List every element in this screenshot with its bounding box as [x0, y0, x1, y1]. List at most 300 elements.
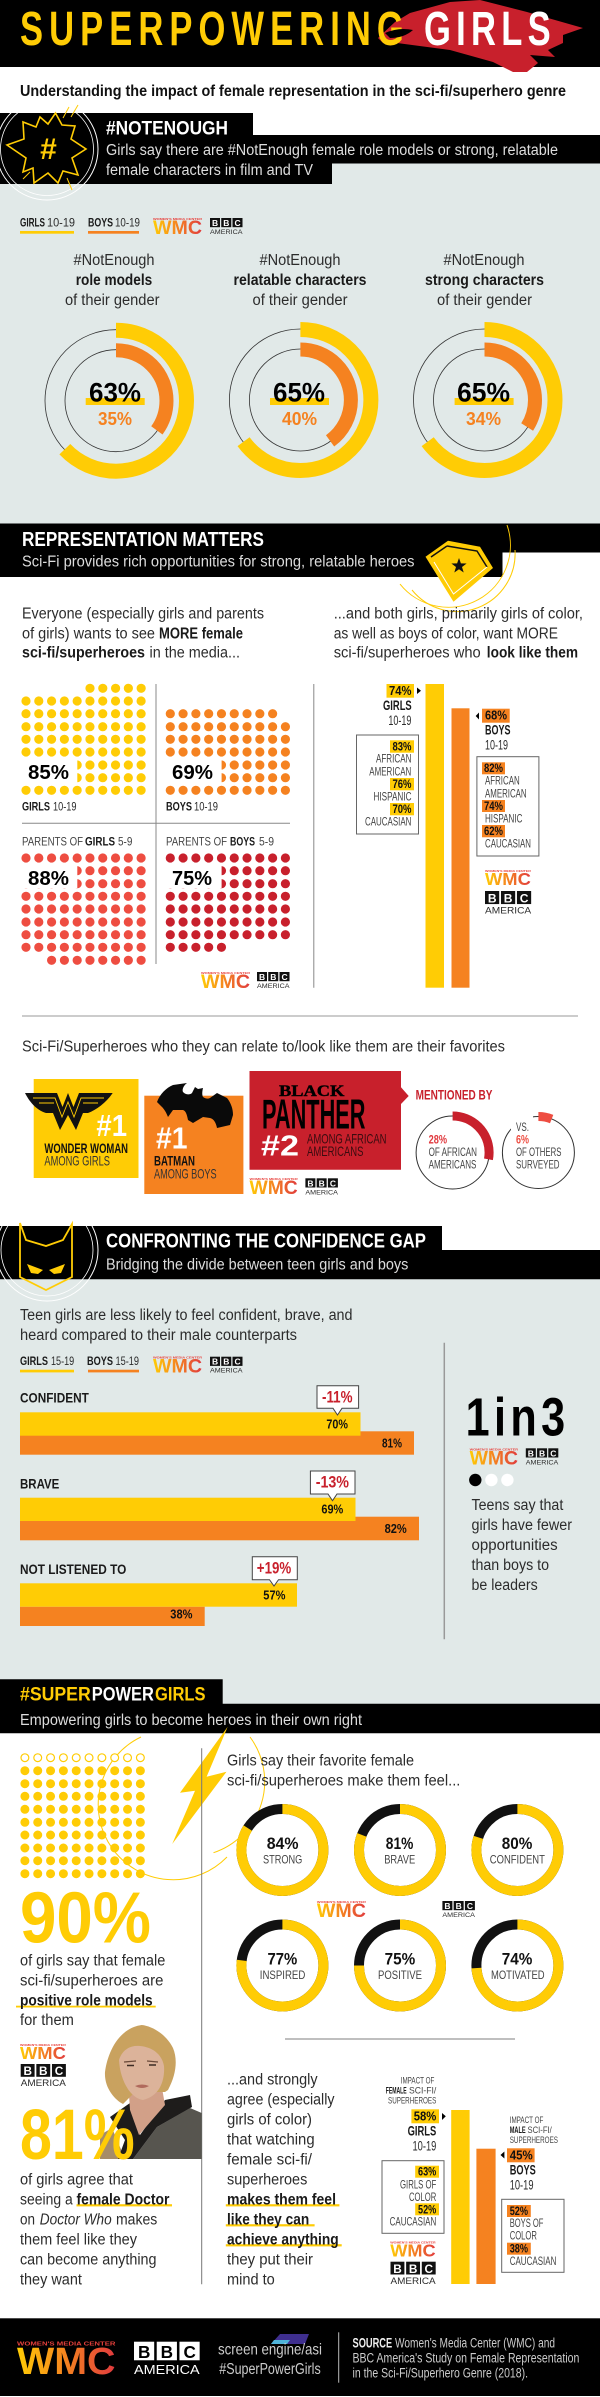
text: everyone wants more: MORE female	[159, 625, 243, 642]
logo: BBC America: AMERICA	[526, 1459, 559, 1466]
callout: -13%	[310, 1471, 355, 1501]
logo: WMC: WMC	[20, 2043, 66, 2063]
ring: 77% inspired: INSPIRED	[260, 1968, 306, 1982]
icon: burst with hash: #	[40, 133, 57, 166]
donut chart: 63% vs 35%: 63%	[89, 378, 141, 408]
chart: 28% of African Americans: 28%	[429, 1134, 447, 1146]
legend: girls and boys 10-19: 10-19	[47, 218, 75, 230]
stat: 81%: them feel like they	[20, 2231, 137, 2248]
logo: WMC: WOMEN'S MEDIA CENTER	[390, 2242, 436, 2245]
dot chart: parents of boys 75%: 5-9	[259, 836, 274, 848]
girls breakdown: 10-19	[388, 712, 412, 728]
male heroes breakdown: IMPACT OF	[510, 2115, 544, 2125]
male heroes breakdown: 10-19	[510, 2176, 534, 2192]
panel: Wonder Woman: WONDER WOMAN	[44, 1140, 128, 1156]
chart: 6% of others surveyed: SURVEYED	[516, 1158, 560, 1172]
text: relatable label: relatable characters	[234, 272, 366, 289]
ring: 74% motivated: 74%	[502, 1949, 532, 1968]
stat: 90%: 90%	[20, 1879, 151, 1959]
male heroes breakdown: SUPERHEROES	[510, 2135, 558, 2145]
stat: 81%: of girls agree that	[20, 2171, 134, 2188]
logo: BBC America	[210, 218, 243, 236]
text: strongly agree	[226, 2071, 342, 2288]
bar chart: confident: CONFIDENT	[20, 1390, 89, 1406]
logo: BBC America: AMERICA	[442, 1912, 476, 1919]
logo: BBC America: B	[409, 2262, 417, 2276]
panel: Representation Matters header: Sci-Fi provides rich opportunities for strong, relatable heroes	[22, 554, 415, 571]
ring: 80% confident: 80%	[502, 1834, 532, 1853]
legend: girls and boys 10-19	[20, 218, 140, 234]
logo: BBC America: B	[393, 2262, 402, 2276]
callout: +19%	[252, 1557, 297, 1586]
panel: Representation Matters header: REPRESENTATION MATTERS	[22, 529, 264, 551]
panel: not enough background	[0, 163, 600, 524]
logo: WMC: WOMEN'S MEDIA CENTER	[20, 2044, 66, 2047]
dot chart: girls 85%: 85%	[28, 762, 69, 784]
girls breakdown: GIRLS	[383, 697, 412, 713]
logo: BBC America: C	[234, 218, 241, 228]
bar: female heroes impact 58%	[451, 2110, 470, 2284]
stat: 81%: 81%	[20, 2096, 135, 2175]
panel: Confronting the Confidence Gap header	[0, 1199, 600, 1301]
text: favorites intro: Sci-Fi/Superheroes who they can relate to/look like them are their favorites	[22, 1039, 505, 1056]
girls breakdown: 76%	[392, 779, 412, 791]
panel: #SuperPowerGirls header: Empowering girls to become heroes in their own right	[20, 1712, 363, 1729]
logo: BBC America: C	[183, 2342, 196, 2362]
logo: BBC America: B	[223, 218, 229, 228]
stat: 90%: sci-fi/superheroes are	[20, 1973, 163, 1990]
panel: header banner	[0, 0, 600, 72]
ring: 74% motivated	[476, 1924, 558, 2006]
panel: Wonder Woman: #1	[96, 1108, 127, 1143]
stat: 81%: they want	[20, 2271, 83, 2288]
stat: 90%: for them	[20, 2012, 74, 2029]
legend: girls and boys 15-19: BOYS	[87, 1356, 113, 1368]
text: favorite heroes intro: Girls say their favorite female	[227, 1753, 414, 1770]
boys breakdown: BOYS	[485, 722, 510, 738]
stat: 90%: positive role models	[20, 1993, 153, 2010]
panel: confidence gap background	[0, 1250, 600, 1704]
girls breakdown: 83%	[392, 741, 412, 753]
panel: 1 in 3 stat: 1in3	[466, 1388, 565, 1448]
text: favorite heroes intro	[227, 1753, 460, 1790]
logo: BBC America: AMERICA	[305, 1189, 339, 1196]
red brush stroke	[378, 0, 583, 72]
panel: Black Panther: AMONG AFRICAN	[307, 1131, 386, 1147]
text: favorite heroes intro: sci-fi/superheroes make them feel...	[227, 1773, 460, 1790]
logo: BBC America: B	[528, 1448, 534, 1458]
logo: BBC America: C	[234, 1357, 241, 1367]
text: teen girls intro	[20, 1307, 352, 1344]
stat: 81%	[20, 2096, 172, 2288]
ring: 80% confident	[476, 1809, 558, 1891]
logo: BBC America: B	[307, 1178, 314, 1188]
legend: girls and boys 10-19: 10-19	[115, 218, 140, 230]
panel: 1 in 3 stat: Teens say that	[472, 1497, 564, 1514]
chart: 28% of African Americans	[416, 1116, 489, 1189]
boys breakdown: AFRICAN	[485, 774, 520, 788]
legend: girls and boys 15-19: 15-19	[51, 1356, 74, 1368]
stat: 81%: can become anything	[20, 2251, 156, 2268]
text: everyone wants more: Everyone (especially girls and parents	[22, 605, 264, 622]
text: strongly agree: they put their	[227, 2251, 313, 2268]
chart: 6% of others surveyed: OF OTHERS	[516, 1145, 561, 1159]
logo: BBC America: B	[444, 1901, 451, 1911]
logo: WMC: WOMEN'S MEDIA CENTER	[317, 1900, 366, 1904]
text: strongly agree: female sci-fi/	[227, 2151, 313, 2168]
boys breakdown: CAUCASIAN	[485, 836, 531, 850]
bar chart: confident	[20, 1386, 414, 1455]
donut chart: 65% vs 34%: 34%	[466, 409, 501, 429]
logo: BBC America: C	[467, 1901, 473, 1911]
text: teen girls intro: Teen girls are less likely to feel confident, brave, and	[20, 1307, 352, 1324]
panel: footer	[0, 2318, 600, 2396]
female heroes breakdown: SUPERHEROES	[388, 2095, 436, 2105]
chart: 28% of African Americans: OF AFRICAN	[429, 1145, 477, 1159]
chart: 6% of others surveyed	[502, 1112, 574, 1188]
panel: strong characters	[414, 252, 556, 471]
logo: BBC America	[21, 2064, 66, 2088]
heading: #NOTENOUGH	[106, 118, 228, 140]
icon: wonder woman logo	[25, 1093, 113, 1130]
ring: 77% inspired	[241, 1924, 323, 2006]
logo: WMC: WMC	[250, 1178, 298, 1199]
text: strongly agree: ...and strongly	[227, 2071, 318, 2088]
dot chart: parents of girls 88%: 5-9	[118, 836, 132, 848]
ring: 81% brave: BRAVE	[384, 1853, 415, 1867]
logo: BBC America: B	[456, 1901, 462, 1911]
text: everyone wants more: sci-fi/superheroes	[22, 644, 145, 661]
icon: lightning bolt	[172, 1727, 228, 1844]
bar chart: confident: 81%	[382, 1436, 402, 1450]
logo: BBC America: AMERICA	[210, 229, 243, 236]
panel: Black Panther: AMERICANS	[307, 1143, 364, 1159]
male heroes breakdown: SCI-FI/	[528, 2125, 552, 2135]
icon: mask	[0, 1199, 98, 1301]
text: role models label: role models	[76, 272, 152, 289]
stat: 90%: of girls say that female	[20, 1953, 165, 1970]
description	[106, 142, 558, 179]
bar chart: brave	[20, 1471, 419, 1540]
icon: bat	[157, 1083, 233, 1128]
legend: girls and boys 10-19: GIRLS	[20, 218, 45, 230]
text: everyone wants more: in the media...	[150, 644, 240, 661]
dot chart: parents of boys 75%: BOYS	[230, 836, 255, 848]
girls breakdown: AFRICAN	[376, 752, 411, 766]
text: strong label: #NotEnough	[444, 252, 524, 269]
donut chart: 65% vs 40%	[229, 329, 371, 471]
logo: BBC America: B	[23, 2064, 32, 2078]
logo: BBC America: C	[520, 891, 529, 905]
logo: BBC America: B	[259, 972, 265, 982]
girls breakdown	[356, 684, 421, 834]
donut chart: 65% vs 40%: 65%	[273, 378, 325, 408]
bar chart: brave: 82%	[385, 1522, 407, 1536]
legend: girls and boys 10-19: BOYS	[88, 218, 113, 230]
logo: BBC America	[485, 891, 532, 916]
male heroes breakdown: BOYS OF	[510, 2216, 543, 2230]
stat: 81%: seeing a	[20, 2191, 73, 2208]
stat: 81%: on	[20, 2211, 35, 2228]
text: girls of color want: as well as boys of color, want MORE	[334, 625, 558, 642]
boys breakdown: AMERICAN	[485, 786, 527, 800]
panel: #NotEnough header	[0, 98, 600, 200]
text: strongly agree: that watching	[227, 2131, 315, 2148]
male heroes breakdown: 45%	[510, 2148, 533, 2162]
dot chart: parents of girls 88%: 88%	[28, 868, 69, 890]
girls breakdown: 70%	[392, 804, 412, 816]
ring: 84% strong: STRONG	[263, 1853, 302, 1867]
dot chart: parents of girls 88%	[20, 836, 141, 960]
legend: girls and boys 15-19	[20, 1356, 139, 1372]
text: girls of color want	[334, 605, 583, 661]
dot chart: parents of girls 88%: PARENTS OF	[22, 836, 83, 848]
male heroes breakdown: MALE	[510, 2125, 526, 2135]
callout: -11%	[317, 1386, 359, 1415]
text: strong label: of their gender	[437, 292, 532, 309]
text: role models label: of their gender	[65, 292, 160, 309]
logo: BBC America: C	[330, 1178, 336, 1188]
logo: BBC America: AMERICA	[390, 2276, 436, 2286]
male heroes breakdown: 52%	[510, 2206, 528, 2218]
logo: BBC America: B	[488, 891, 497, 905]
donut chart: 65% vs 34%: 65%	[457, 378, 510, 408]
panel: Confronting the Confidence Gap header: Bridging the divide between teen girls and boys	[106, 1256, 409, 1273]
panel: #SuperPowerGirls header: POWER	[92, 1684, 154, 1706]
logo: BBC America: B	[212, 218, 218, 228]
panel: Wonder Woman	[25, 1079, 138, 1178]
dot chart: parents of boys 75%: PARENTS OF	[166, 836, 227, 848]
text: role models label	[65, 252, 160, 309]
girls breakdown: CAUCASIAN	[365, 814, 411, 828]
logo: BBC America: C	[55, 2064, 64, 2078]
panel: relatable characters	[229, 252, 371, 471]
panel: #SuperPowerGirls header: GIRLS	[155, 1684, 206, 1706]
title: GIRLS	[424, 1, 551, 55]
text: everyone wants more	[22, 605, 264, 661]
donut chart: 65% vs 40%: 40%	[282, 409, 317, 429]
text: role models label: #NotEnough	[74, 252, 154, 269]
logo: screen engine/asi: screen engine/asi	[218, 2341, 322, 2358]
ring: 75% positive: POSITIVE	[378, 1968, 422, 1982]
callout: -11%: -11%	[322, 1387, 352, 1406]
panel: Black Panther	[250, 1071, 409, 1170]
donut chart: 65% vs 34%	[414, 329, 556, 471]
text: relatable label: #NotEnough	[260, 252, 340, 269]
boys breakdown: 10-19	[485, 737, 508, 753]
dot chart: boys 69%: 69%	[172, 762, 213, 784]
chart: 28% of African Americans: AMERICANS	[429, 1158, 476, 1172]
source text	[352, 2335, 579, 2380]
title: SUPERPOWERING	[20, 1, 404, 55]
hashtag: #SuperPowerGirls	[219, 2361, 321, 2378]
stat: 81%: makes	[116, 2211, 158, 2228]
female heroes breakdown: GIRLS	[408, 2122, 436, 2138]
panel: #SuperPowerGirls header: #SUPER	[20, 1684, 91, 1706]
ring: 84% strong: 84%	[267, 1834, 298, 1853]
bar chart: confident: 70%	[326, 1417, 348, 1431]
panel: #SuperPowerGirls header	[0, 1679, 600, 1733]
female heroes breakdown: 63%	[418, 2167, 436, 2179]
text: strongly agree: mind to	[227, 2271, 275, 2288]
chart: 6% of others surveyed: 6%	[516, 1134, 529, 1146]
logo: WMC: WMC	[317, 1901, 366, 1922]
panel: Confronting the Confidence Gap header: CONFRONTING THE CONFIDENCE GAP	[106, 1230, 426, 1252]
logo: BBC America: B	[504, 891, 513, 905]
logo: WMC: WOMEN'S MEDIA CENTER	[201, 971, 250, 975]
female heroes breakdown: FEMALE	[386, 2085, 407, 2095]
logo: BBC America: AMERICA	[485, 906, 532, 916]
dot chart: girls 85%: GIRLS	[22, 802, 50, 814]
logo: BBC America	[442, 1901, 476, 1919]
text: relatable label	[234, 252, 366, 309]
ring: 84% strong	[241, 1809, 323, 1891]
text: everyone wants more: of girls) wants to see	[22, 625, 155, 642]
logo: WMC: WMC	[153, 1357, 202, 1378]
ring: 75% positive	[359, 1924, 441, 2006]
logo: WMC: WOMEN'S MEDIA CENTER	[17, 2342, 116, 2348]
logo: WMC: WMC	[153, 218, 202, 239]
panel: Wonder Woman: AMONG GIRLS	[44, 1153, 110, 1169]
panel: Batman	[144, 1083, 243, 1194]
panel: Batman: #1	[156, 1120, 188, 1155]
text: strong label: strong characters	[425, 272, 544, 289]
logo: BBC America	[134, 2342, 200, 2377]
source text: SOURCE	[352, 2335, 392, 2350]
logo: BBC America: AMERICA	[21, 2078, 66, 2088]
boys breakdown: HISPANIC	[485, 811, 523, 825]
panel: Black Panther: PANTHER	[262, 1090, 366, 1137]
stat: 81%: Doctor Who	[40, 2211, 112, 2228]
panel: Black Panther: BLACK	[279, 1083, 345, 1100]
logo: BBC America: B	[539, 1448, 545, 1458]
logo: WMC: WOMEN'S MEDIA CENTER	[153, 217, 202, 221]
panel: 1 in 3 stat: than boys to	[472, 1557, 549, 1574]
panel: Representation Matters header	[0, 524, 600, 577]
dot chart: parents of boys 75%: 75%	[172, 868, 212, 890]
male heroes breakdown: CAUCASIAN	[510, 2254, 556, 2268]
dot chart: boys 69%	[164, 714, 286, 814]
bar chart: not listened to: 57%	[263, 1588, 286, 1602]
logo: BBC America	[526, 1448, 559, 1466]
logo: BBC America: B	[39, 2064, 48, 2078]
logo: BBC America: B	[161, 2342, 173, 2362]
chart: 6% of others surveyed: VS.	[516, 1120, 529, 1134]
logo: BBC America	[390, 2262, 436, 2286]
logo: BBC America	[210, 1357, 243, 1375]
panel: Black Panther: #2	[261, 1131, 299, 1163]
girls breakdown: 74%	[389, 684, 412, 698]
logo: BBC America: C	[282, 972, 288, 982]
text: strongly agree: girls of color)	[227, 2111, 312, 2128]
female heroes breakdown: GIRLS OF	[400, 2177, 436, 2191]
ring: 77% inspired: 77%	[268, 1949, 297, 1968]
female heroes breakdown: 58%	[414, 2110, 436, 2124]
logo: WMC: WOMEN'S MEDIA CENTER	[153, 1356, 202, 1360]
logo: BBC America: B	[212, 1357, 218, 1367]
female heroes breakdown: CAUCASIAN	[390, 2215, 436, 2229]
logo: WMC: WOMEN'S MEDIA CENTER	[485, 870, 531, 873]
boys breakdown	[476, 708, 539, 856]
description: Girls say there are #NotEnough female role models or strong, relatable	[106, 142, 558, 159]
icon: lightning bolt rings	[98, 1737, 265, 1880]
source text: in the Sci-Fi/Superhero Genre (2018).	[352, 2365, 528, 2380]
boys breakdown: 82%	[484, 763, 503, 775]
dot chart: parents of boys 75%	[164, 836, 286, 947]
logo: BBC America: AMERICA	[210, 1368, 243, 1375]
panel: role models	[45, 252, 187, 472]
bar: girls 74%	[426, 684, 444, 988]
bar chart: brave: 69%	[321, 1503, 343, 1517]
text: strongly agree: like they can	[227, 2211, 309, 2228]
logo: WMC: WMC	[470, 1448, 518, 1469]
boys breakdown: 74%	[484, 801, 503, 813]
bar: male heroes impact 45%	[476, 2149, 496, 2284]
bar chart: not listened to: NOT LISTENED TO	[20, 1561, 126, 1577]
bar: boys 68%	[452, 708, 470, 988]
logo: WMC: WMC	[485, 869, 531, 889]
panel: Batman: BATMAN	[154, 1153, 195, 1169]
male heroes breakdown: COLOR	[510, 2229, 537, 2243]
female heroes breakdown	[382, 2075, 446, 2233]
ring: 81% brave: 81%	[386, 1834, 413, 1853]
ring: 80% confident: CONFIDENT	[490, 1853, 545, 1867]
stat: 81%: female Doctor	[76, 2191, 170, 2208]
dot chart: girls 85%: 10-19	[53, 802, 76, 814]
logo: BBC America: B	[270, 972, 276, 982]
heading: mentioned by: MENTIONED BY	[416, 1087, 493, 1103]
logo: BBC America: C	[550, 1448, 556, 1458]
text: strongly agree: agree (especially	[227, 2091, 335, 2108]
ring: 74% motivated: MOTIVATED	[491, 1968, 545, 1982]
text: strongly agree: makes them feel	[227, 2191, 336, 2208]
description: female characters in film and TV	[106, 162, 314, 179]
boys breakdown: 68%	[485, 708, 507, 722]
logo: BBC America: B	[223, 1357, 229, 1367]
logo: WMC: WOMEN'S MEDIA CENTER	[250, 1177, 298, 1181]
donut chart: 63% vs 35%: 35%	[98, 409, 132, 429]
logo: WMC: WMC	[17, 2340, 115, 2383]
panel: 1 in 3 stat: opportunities	[472, 1537, 558, 1554]
male heroes breakdown	[500, 2115, 564, 2272]
text: girls of color want: look like them	[487, 644, 578, 661]
male heroes breakdown: BOYS	[510, 2161, 536, 2177]
bar chart: not listened to	[20, 1557, 297, 1626]
panel: 1 in 3 stat: be leaders	[472, 1577, 538, 1594]
callout: +19%: +19%	[257, 1558, 291, 1577]
dot chart: 90% of girls	[25, 1758, 140, 1874]
logo: BBC America	[305, 1178, 339, 1196]
callout: -13%: -13%	[316, 1473, 349, 1492]
photo: Doctor Who portrait	[100, 2025, 202, 2159]
female heroes breakdown: IMPACT OF	[401, 2075, 435, 2085]
text: girls of color want: ...and both girls, primarily girls of color,	[334, 605, 583, 622]
logo: WMC: WOMEN'S MEDIA CENTER	[470, 1447, 518, 1451]
logo: BBC America: AMERICA	[134, 2362, 200, 2377]
bar chart: brave: BRAVE	[20, 1475, 59, 1491]
female heroes breakdown: 52%	[418, 2204, 436, 2216]
logo: BBC America: B	[138, 2342, 150, 2362]
stat: 90%	[16, 1879, 165, 2029]
logo: BBC America: AMERICA	[257, 983, 290, 990]
logo: BBC America: B	[319, 1178, 325, 1188]
female heroes breakdown: 10-19	[412, 2137, 436, 2153]
icon: burst with hash	[0, 98, 98, 200]
text: strong label	[425, 252, 544, 309]
legend: girls and boys 15-19: GIRLS	[20, 1356, 48, 1368]
bar chart: not listened to: 38%	[170, 1607, 192, 1621]
logo: BBC America: C	[425, 2262, 434, 2276]
